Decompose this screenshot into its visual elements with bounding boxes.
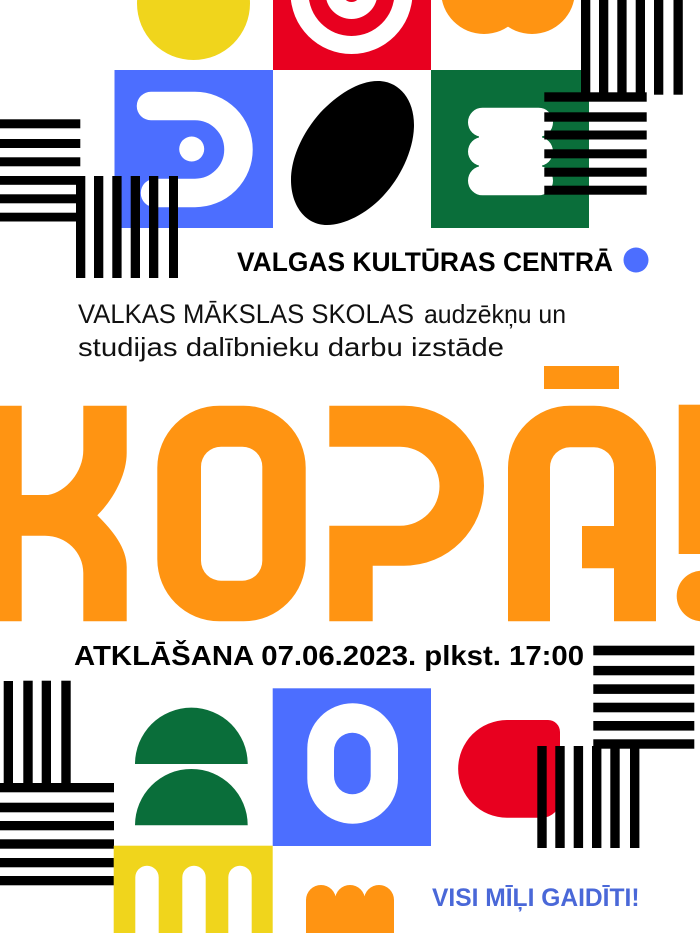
letter P [329, 406, 484, 621]
title: KOPĀ! [0, 366, 700, 621]
icon: orange scalloped shape [306, 885, 394, 933]
icon: yellow square with white arches [114, 846, 273, 933]
icon: green semicircles [135, 708, 248, 825]
stripes: top right [544, 0, 683, 195]
icon: black tilted oval [291, 81, 414, 225]
exclamation mark [679, 405, 700, 554]
letter K [0, 406, 127, 621]
icon: yellow circle [137, 0, 250, 60]
stripes: bottom right [537, 646, 694, 848]
icon: blue dot [624, 248, 648, 272]
icon: orange double lobe [441, 0, 575, 34]
stripes: bottom left [0, 681, 114, 885]
welcome text: VISI MĪĻI GAIDĪTI! [432, 884, 640, 912]
letter O [157, 406, 306, 621]
letter A with macron [508, 406, 656, 621]
icon: red rounded shape [458, 720, 560, 818]
icon: blue square with white O [273, 688, 431, 846]
stripes: top left [0, 119, 178, 278]
icon: green square with white scalloped shape [431, 70, 589, 228]
subtitle text: VALKAS MĀKSLAS SKOLAS [78, 299, 414, 329]
subtitle text [78, 299, 566, 362]
opening date text: ATKLĀŠANA 07.06.2023. plkst. 17:00 [74, 639, 584, 671]
subtitle text: audzēkņu un [424, 299, 566, 329]
subtitle text: studijas dalībnieku darbu izstāde [78, 332, 504, 362]
icon: blue square with white hook and dot [114, 70, 273, 228]
venue heading: VALGAS KULTŪRAS CENTRĀ [237, 247, 613, 277]
icon: red square with concentric rings [273, 0, 431, 70]
